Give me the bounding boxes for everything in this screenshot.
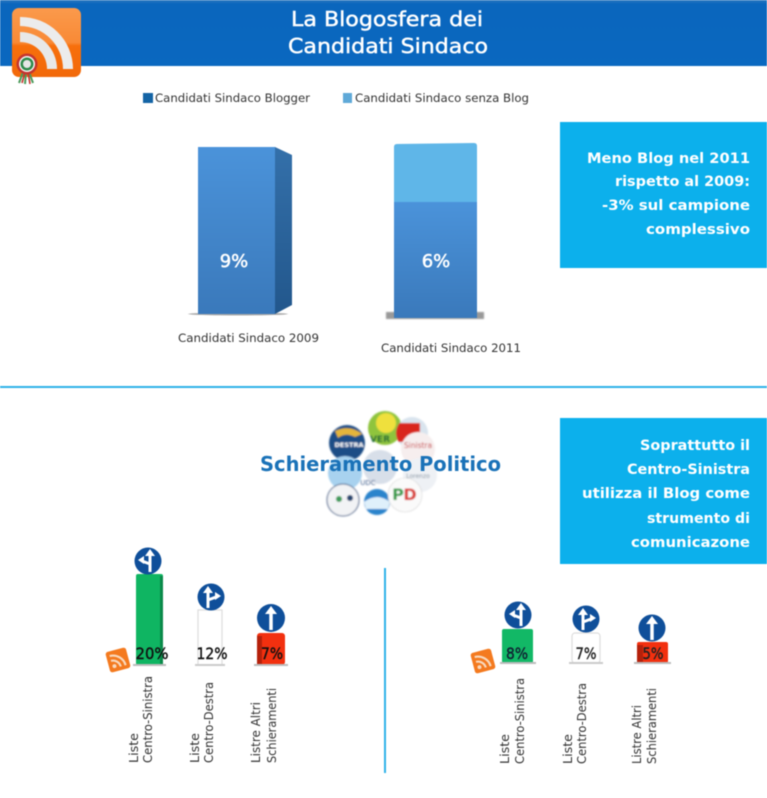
left chart: centro-destra bar 12% <box>195 584 228 666</box>
left chart: centro-sinistra bar 20%: 20% <box>136 644 168 663</box>
left chart: axis labels: Liste <box>187 733 202 763</box>
party logos: VER <box>370 435 390 445</box>
callout: meno blog: -3% sul campione <box>602 198 750 214</box>
right chart: centro-destra bar 7%: 7% <box>576 644 596 663</box>
left chart: altri schieramenti bar 7%: 7% <box>261 644 283 663</box>
callout: centro-sinistra: Centro-Sinistra <box>627 462 750 478</box>
callout: centro-sinistra: utilizza il Blog come <box>582 486 750 502</box>
party logos: DESTRA <box>334 441 364 449</box>
party logos: D <box>403 485 417 504</box>
heading: Schieramento Politico: Schieramento Politico <box>260 452 501 476</box>
right chart: centro-sinistra bar 8% <box>500 602 536 664</box>
callout: meno blog: Meno Blog nel 2011 <box>587 151 750 167</box>
left chart: axis labels: Centro-Sinistra <box>140 676 155 763</box>
left chart: centro-destra bar 12%: 12% <box>196 644 228 663</box>
title <box>288 7 488 58</box>
right chart: axis labels: Schieramenti <box>644 688 659 764</box>
callout: meno blog: rispetto al 2009: <box>615 174 750 190</box>
bar chart: 2011: 6% <box>422 251 450 272</box>
legend <box>143 91 529 105</box>
callout: centro-sinistra: strumento di <box>647 511 750 527</box>
callout: centro-sinistra: Soprattutto il <box>640 438 750 454</box>
title: La Blogosfera dei <box>291 7 483 31</box>
right chart: axis labels: Listre Altri <box>629 705 644 764</box>
right chart: altri schieramenti bar 5%: 5% <box>642 644 664 663</box>
callout: centro-sinistra <box>560 418 767 564</box>
title: Candidati Sindaco <box>288 34 488 58</box>
bar chart: 2009 <box>178 147 319 345</box>
party logos: Sinistra <box>404 441 432 450</box>
left chart: altri schieramenti bar 7% <box>254 604 288 666</box>
right chart: centro-sinistra bar 8%: 8% <box>506 644 528 663</box>
bar chart: 2011: Candidati Sindaco 2011 <box>381 341 521 355</box>
party logos: UDC <box>360 479 376 487</box>
left chart: axis labels: Liste <box>126 733 141 763</box>
left chart: centro-sinistra bar 20% <box>133 548 168 666</box>
legend: Candidati Sindaco senza Blog <box>355 91 529 105</box>
right chart: axis labels: Liste <box>497 734 512 764</box>
party logos <box>327 411 437 516</box>
right chart: rss icon <box>470 648 496 674</box>
bar chart: 2009: 9% <box>220 251 248 272</box>
left chart: axis labels: Listre Altri <box>248 702 263 763</box>
party logos: P <box>392 485 404 504</box>
right chart: axis labels: Centro-Sinistra <box>512 678 527 764</box>
right chart: axis labels <box>497 678 659 764</box>
right chart: axis labels: Liste <box>560 734 575 764</box>
left chart: axis labels <box>126 676 279 763</box>
callout: meno blog: complessivo <box>646 222 750 238</box>
header banner <box>0 0 767 66</box>
callout: centro-sinistra: comunicazone <box>631 535 750 551</box>
left chart: rss icon <box>105 647 131 673</box>
left chart: axis labels: Centro-Destra <box>201 682 216 763</box>
callout: meno blog <box>560 122 767 268</box>
icon: RSS logo with rosette <box>12 8 81 84</box>
left chart: axis labels: Schieramenti <box>264 688 279 763</box>
bar chart: 2009: Candidati Sindaco 2009 <box>178 331 319 345</box>
bar chart: 2011 <box>381 143 521 355</box>
right chart: axis labels: Centro-Destra <box>574 683 589 764</box>
right chart: centro-destra bar 7% <box>569 606 603 664</box>
right chart: altri schieramenti bar 5% <box>634 614 671 664</box>
legend: Candidati Sindaco Blogger <box>155 91 310 105</box>
party logos: Lorenzo <box>406 473 430 480</box>
